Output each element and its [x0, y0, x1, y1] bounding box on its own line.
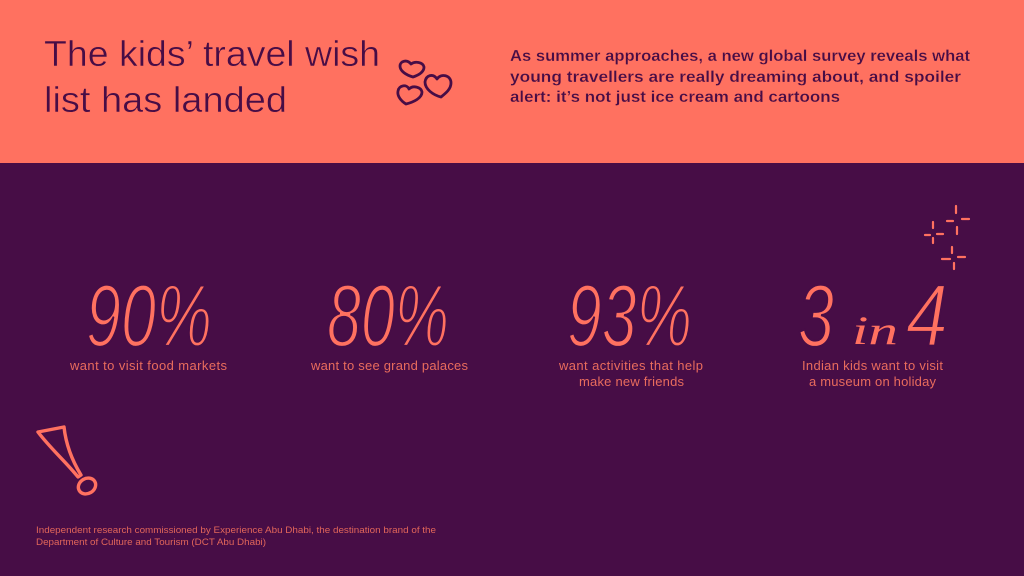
- intro text: young travellers are really dreaming about, and spoiler: [510, 69, 961, 86]
- stat: 3 in 4: 3: [798, 266, 834, 365]
- caption: museum: a museum on holiday: [809, 374, 936, 389]
- footnote: Department of Culture and Tourism (DCT Abu Dhabi): [36, 537, 266, 548]
- intro text: [510, 48, 971, 106]
- stat: 90%: [69, 266, 228, 373]
- icon: exclamation mark: [38, 427, 99, 497]
- footnote: [36, 525, 436, 548]
- stat: 80%: 80%: [327, 266, 449, 365]
- stat: 80%: [310, 266, 468, 373]
- caption: grand palaces: want to see grand palaces: [310, 358, 468, 373]
- caption: new friends: make new friends: [579, 374, 684, 389]
- stat: 3 in 4: [798, 266, 948, 389]
- stat: 93%: 93%: [567, 266, 692, 365]
- header band: [0, 0, 1024, 163]
- intro text: alert: it’s not just ice cream and cartoons: [510, 89, 840, 106]
- stat: 90%: 90%: [86, 266, 212, 365]
- caption: museum: Indian kids want to visit: [802, 358, 943, 373]
- caption: museum: [802, 358, 943, 389]
- footnote: Independent research commissioned by Experience Abu Dhabi, the destination brand of the: [36, 525, 436, 536]
- stat: 93%: [558, 266, 703, 389]
- title: list has landed: [44, 79, 287, 120]
- caption: food markets: want to visit food markets: [69, 358, 228, 373]
- icon: sparkles: [925, 206, 969, 269]
- title: The kids’ travel wish: [44, 33, 380, 74]
- stat: 3 in 4: in: [852, 308, 898, 353]
- caption: new friends: [558, 358, 703, 389]
- caption: new friends: want activities that help: [558, 358, 703, 373]
- intro text: As summer approaches, a new global survey reveals what: [510, 48, 971, 65]
- stat: 3 in 4: 4: [906, 266, 948, 365]
- title: [44, 33, 380, 120]
- icon: hearts: [398, 61, 451, 104]
